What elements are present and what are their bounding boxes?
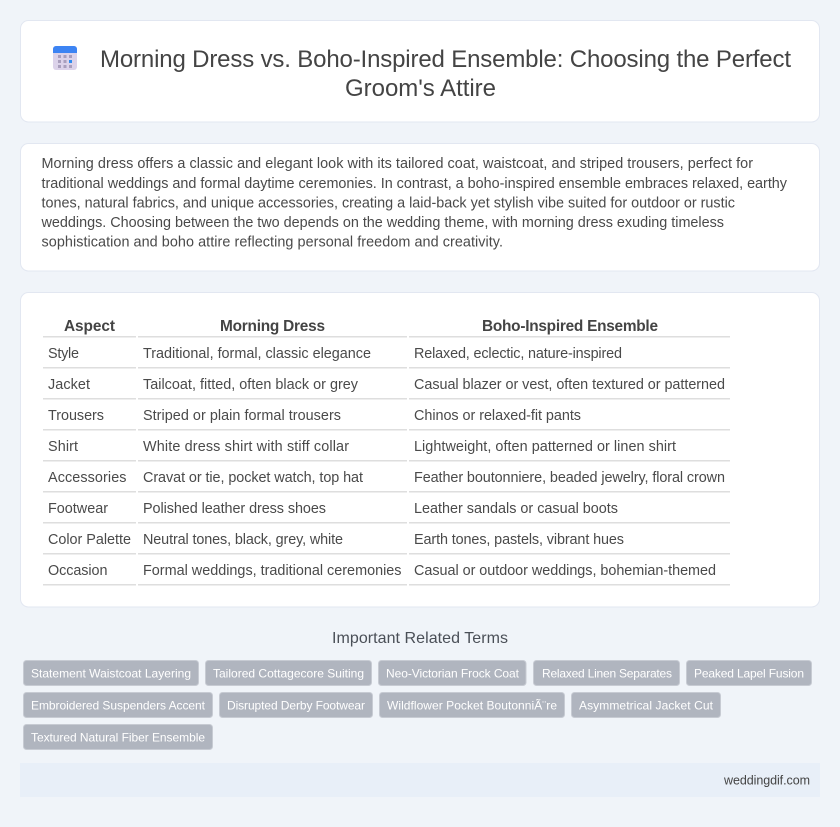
panel: related term tags: Asymmetrical Jacket Cut (579, 698, 714, 712)
panel: related term tags: Wildflower Pocket BoutonniÃ¨re (387, 698, 557, 712)
row: color palette: Neutral tones, black, grey, white (143, 532, 343, 548)
panel: introduction text (20, 144, 820, 271)
row: occasion (48, 563, 716, 579)
row: accessories (48, 470, 725, 486)
row: trousers: Striped or plain formal trousers (143, 408, 341, 424)
text block: summary paragraph: sophistication and boho attire reflecting personal freedom and creativity. (42, 234, 503, 250)
panel: title card (20, 20, 820, 122)
panel: comparison table (20, 292, 820, 607)
panel: related term tags: Tailored Cottagecore Suiting (213, 666, 364, 680)
row: shirt: White dress shirt with stiff collar (143, 439, 349, 455)
heading: important related terms: Important Related Terms (332, 630, 508, 647)
row: occasion: Occasion (48, 563, 108, 579)
row: occasion: Casual or outdoor weddings, bohemian-themed (414, 563, 716, 579)
footer (20, 763, 820, 797)
title: Groom's Attire (345, 75, 496, 102)
text block: summary paragraph: Morning dress offers a classic and elegant look with its tailored coat, waistcoat, and striped trousers, perfect for (42, 156, 753, 172)
footer: weddingdif.com (723, 774, 810, 788)
row: accessories: Cravat or tie, pocket watch, top hat (143, 470, 363, 486)
panel: related term tags: Statement Waistcoat Layering (31, 666, 191, 680)
panel: related term tags: Textured Natural Fiber Ensemble (31, 730, 205, 744)
table column headers (64, 318, 658, 335)
row: shirt: Lightweight, often patterned or linen shirt (414, 439, 676, 455)
row: shirt (48, 439, 676, 455)
row: jacket (48, 377, 725, 393)
panel: related term tags (24, 660, 812, 750)
text block: summary paragraph: tones, natural fabrics, and unique accessories, creating a laid-back yet stylish vibe suited for outdoor or rustic (42, 196, 735, 212)
row: trousers (48, 408, 581, 424)
row: color palette: Color Palette (48, 532, 131, 548)
row: color palette: Earth tones, pastels, vibrant hues (414, 532, 624, 548)
row: footwear: Leather sandals or casual boots (414, 501, 618, 517)
row: trousers: Trousers (48, 408, 104, 424)
panel: related term tags: Neo-Victorian Frock Coat (386, 666, 520, 680)
row: footwear: Footwear (48, 501, 108, 517)
text block: summary paragraph (40, 156, 788, 250)
panel: related term tags: Peaked Lapel Fusion (694, 666, 804, 680)
text block: summary paragraph: weddings. Choosing between the two depends on the wedding theme, with morning dress exuding timeless (40, 215, 724, 231)
panel: related term tags: Relaxed Linen Separates (542, 666, 672, 680)
row: style: Style (48, 346, 79, 362)
row: accessories: Feather boutonniere, beaded jewelry, floral crown (414, 470, 725, 486)
title (100, 46, 791, 102)
table column headers: Morning Dress (220, 318, 325, 335)
row: style: Relaxed, eclectic, nature-inspired (414, 346, 622, 362)
row: footwear: Polished leather dress shoes (143, 501, 326, 517)
row: occasion: Formal weddings, traditional ceremonies (143, 563, 402, 579)
panel: related term tags: Disrupted Derby Footwear (227, 698, 365, 712)
row: jacket: Tailcoat, fitted, often black or grey (143, 377, 359, 393)
row: style: Traditional, formal, classic elegance (143, 346, 371, 362)
icon: calendar (53, 46, 77, 70)
row: trousers: Chinos or relaxed-fit pants (414, 408, 581, 424)
row: accessories: Accessories (48, 470, 126, 486)
row: shirt: Shirt (48, 439, 78, 455)
row: color palette (48, 532, 624, 548)
panel: related term tags: Embroidered Suspenders Accent (31, 698, 206, 712)
table column headers: Boho-Inspired Ensemble (482, 318, 658, 335)
row: style (48, 346, 622, 362)
text block: summary paragraph: traditional weddings and formal daytime ceremonies. In contrast, a boho-inspired ensemble embraces relaxed, earthy (42, 176, 788, 192)
title: Morning Dress vs. Boho-Inspired Ensemble: Choosing the Perfect (100, 46, 791, 73)
row: jacket: Casual blazer or vest, often textured or patterned (414, 377, 725, 393)
row: jacket: Jacket (48, 377, 90, 393)
row: footwear (48, 501, 618, 517)
table column headers: Aspect (64, 318, 115, 335)
